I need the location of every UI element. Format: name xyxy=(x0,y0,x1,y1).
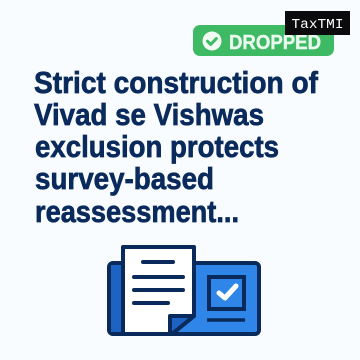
document text lines xyxy=(134,262,183,303)
title: Strict construction of xyxy=(34,66,319,100)
watermark: TaxTMI xyxy=(285,11,350,35)
icon: check circle xyxy=(202,32,222,50)
folded corner xyxy=(170,316,194,334)
title xyxy=(34,66,319,229)
folder panel xyxy=(109,263,259,334)
title: Vivad se Vishwas xyxy=(34,98,264,132)
icon: document and checked folder xyxy=(109,247,259,334)
title: survey-based xyxy=(35,162,214,196)
status badge: dropped xyxy=(193,25,334,56)
title: reassessment... xyxy=(35,195,239,229)
badge label: DROPPED xyxy=(229,32,321,54)
checkbox xyxy=(209,277,244,309)
caption line xyxy=(207,318,245,322)
watermark: TaxTMI: TaxTMI xyxy=(292,18,344,33)
title: exclusion protects xyxy=(35,130,279,164)
document sheet xyxy=(123,247,194,334)
